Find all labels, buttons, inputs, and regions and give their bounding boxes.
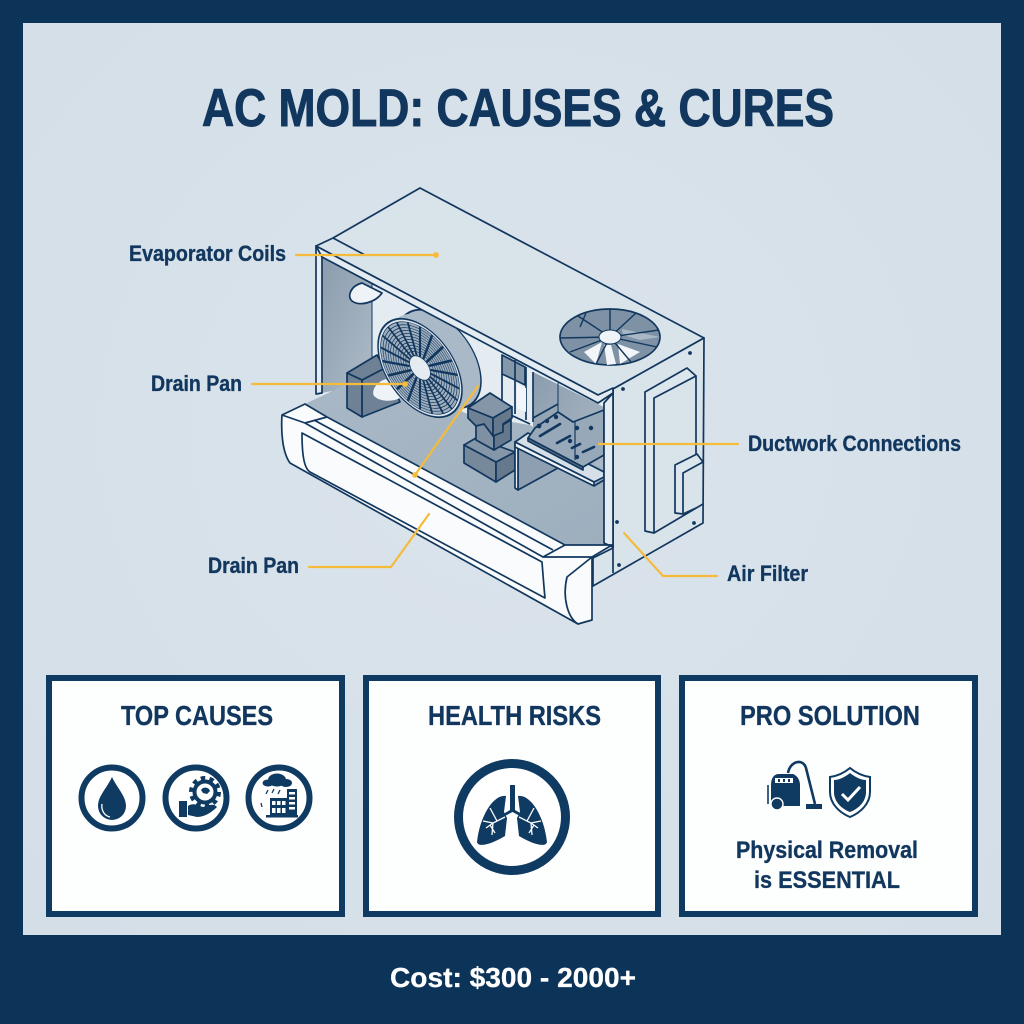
icon: lungs xyxy=(458,764,566,870)
panel: pro solution xyxy=(682,678,975,914)
icon: water drop xyxy=(82,768,142,828)
heading: top causes: TOP CAUSES xyxy=(121,700,273,731)
AC unit illustration xyxy=(282,188,704,624)
label: air filter: Air Filter xyxy=(727,561,808,586)
label: drain pan upper: Drain Pan xyxy=(151,371,242,396)
top face xyxy=(316,188,704,395)
leader: ductwork connections xyxy=(599,443,738,445)
leader: evaporator coils xyxy=(296,253,438,257)
ductwork shelf and plate xyxy=(515,410,604,490)
panel: top causes xyxy=(49,678,342,914)
leader: air filter xyxy=(624,533,717,576)
heading: pro solution: PRO SOLUTION xyxy=(740,700,920,731)
footer cost: Cost: $300 - 2000+ xyxy=(390,962,636,993)
icon: rain and building xyxy=(248,768,310,828)
interior right post xyxy=(604,393,613,547)
text: physical removal: Physical Removal xyxy=(736,837,918,864)
center block component xyxy=(464,393,515,482)
label: drain pan lower: Drain Pan xyxy=(208,553,299,578)
fan xyxy=(378,293,481,434)
icon: hand and gear xyxy=(166,768,226,828)
front cover panel xyxy=(282,238,612,624)
floor xyxy=(305,372,604,546)
leader lines xyxy=(252,253,738,576)
text: is essential: is ESSENTIAL xyxy=(754,867,900,894)
label: evaporator coils: Evaporator Coils xyxy=(129,241,286,266)
interior back wall xyxy=(316,246,604,545)
right side face xyxy=(593,338,704,586)
icon: vacuum cleaner xyxy=(768,762,822,810)
center column xyxy=(500,355,530,424)
left bracket xyxy=(347,355,400,417)
label: ductwork connections: Ductwork Connections xyxy=(748,431,961,456)
top vent xyxy=(560,309,660,365)
leader: fan to pan xyxy=(413,386,478,477)
leader: drain pan upper xyxy=(252,382,407,386)
heading: health risks: HEALTH RISKS xyxy=(428,700,601,731)
leader: drain pan lower xyxy=(309,514,429,567)
icon: shield with check xyxy=(830,768,870,817)
front band under top xyxy=(316,246,613,403)
panel: health risks xyxy=(366,678,658,914)
title: AC MOLD: CAUSES & CURES xyxy=(202,79,834,138)
